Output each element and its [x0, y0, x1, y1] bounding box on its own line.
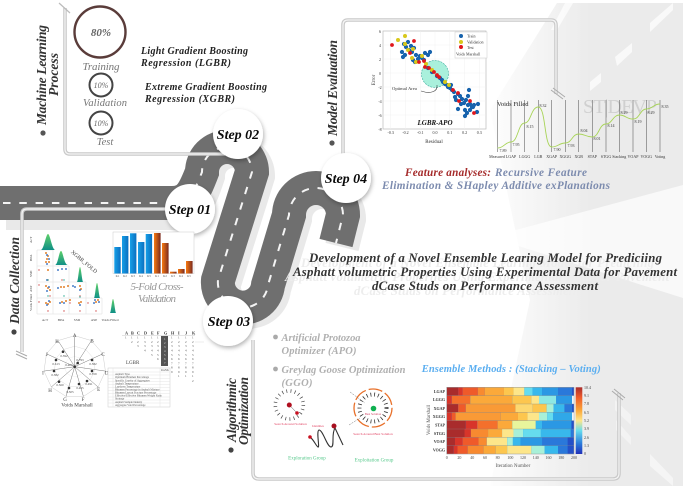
chart: error versus residual scatter plot: -4 [378, 99, 382, 104]
chart: pair plot [29, 234, 119, 322]
step 04 badge [321, 153, 371, 203]
chart: voids filled line chart: LGB [534, 154, 543, 159]
row VOGG [447, 446, 574, 454]
step 03 badge: Step 03 [208, 315, 250, 330]
chart: voids filled line chart: LGGG [519, 154, 530, 159]
chart: ensemble stacked heatmap: 160 [546, 455, 552, 460]
chart: ensemble stacked heatmap: 100 [507, 455, 513, 460]
chart: error versus residual scatter plot: -6 [378, 113, 382, 118]
chart: voids filled line chart: 8.01 [594, 136, 600, 141]
chart: voids filled line chart: XGAP [546, 154, 558, 159]
chart: ensemble stacked heatmap: XGAP [434, 406, 446, 411]
chart: error versus residual scatter plot: LGBR-APO [416, 119, 452, 127]
chart: voids filled line chart: LGAP [506, 154, 517, 159]
chart: ensemble stacked heatmap: 40 [470, 455, 474, 460]
chart: radar feature importance: K [55, 340, 59, 345]
chart: radar feature importance: 0.613 [52, 362, 60, 366]
title: ghost reflection: Development of a Novel Ensemble Learing Model for Prediciing [300, 256, 655, 270]
step 04 badge: Step 04 [325, 172, 367, 187]
table: feature elimination ranks [108, 330, 204, 407]
chart: ensemble stacked heatmap: 5.2 [584, 418, 589, 423]
chart: radar feature importance: H [48, 389, 52, 394]
table: feature elimination ranks: Strategy [115, 398, 125, 401]
diagram: exploitation around best solution: Best Solution [365, 412, 382, 416]
chart: error versus residual scatter plot: 0.3 [477, 130, 482, 135]
chart: voids filled line chart: STAP [588, 154, 598, 159]
chart: radar feature importance: 0.505 [66, 390, 74, 394]
list: greylag goose optimization: (GGO) [282, 378, 312, 389]
chart: voids filled line chart: 8.29 [648, 110, 654, 115]
step 03 badge [203, 296, 253, 346]
table: feature elimination ranks: Aggregate Void Percentage [115, 404, 146, 407]
chart: ensemble stacked heatmap: 1.3 [584, 443, 589, 448]
table: feature elimination ranks: Specific Gravity of Aggregates [115, 379, 150, 382]
text: feature analyses: Recursive Feature [494, 167, 587, 179]
chart: error versus residual scatter plot: Validation [467, 40, 483, 44]
heading: machine learning process: Machine Learning [34, 25, 49, 126]
chart: five fold bar chart [113, 232, 194, 278]
table: feature elimination ranks: ABCDEFGHIJK [125, 330, 196, 336]
chart: pair plot: Voids Filled [29, 294, 33, 311]
chart: ensemble stacked heatmap: VOGG [433, 448, 445, 452]
row STGG [447, 429, 574, 437]
chart: voids filled line chart: 8.32 [540, 103, 546, 108]
chart: pair plot: Voids Filled [102, 318, 119, 322]
chart: error versus residual scatter plot: Optimal Area [392, 86, 417, 91]
diagram: exploitation around best solution: Search Around Best Solution [353, 432, 393, 436]
text: feature analyses: Elimination & SHapley Additive exPlanations [381, 180, 611, 192]
chart: error versus residual scatter plot: 6 [379, 29, 381, 34]
chart: voids filled line chart: ST|DEVP [583, 96, 657, 118]
table: feature elimination ranks: 111 [178, 374, 194, 378]
chart: error versus residual scatter plot: 0.0 [432, 130, 438, 135]
diagram: exploration zigzag: Identities [312, 424, 325, 428]
chart: radar feature importance: 0.582 [89, 362, 97, 366]
chart: pair plot: ASP [29, 286, 33, 292]
chart: voids filled line chart: Voids Filled [497, 101, 529, 108]
title: ghost reflection: Asphatt volumetric Properties Using Experimental Data for Pavement [284, 270, 669, 284]
chart: voids filled line chart: 8.35 [662, 104, 668, 109]
chart: ensemble stacked heatmap: 120 [520, 455, 526, 460]
table: feature elimination ranks: 7777 [171, 362, 194, 366]
table: feature elimination ranks: 33333333 [137, 344, 194, 348]
chart: radar feature importance: 0.392 [60, 354, 68, 358]
table: feature elimination ranks: Effective/Effective Bitumen Weight Ratio [115, 394, 163, 398]
chart: radar feature importance: Voids Marshall [61, 402, 93, 408]
chart: ensemble stacked heatmap: 9.1 [584, 393, 589, 398]
table: feature elimination ranks: 8888 [171, 366, 194, 370]
title: main heading: Development of a Novel Ensemble Learing Model for Prediciing [308, 251, 663, 265]
frame: model evaluation [343, 20, 565, 165]
chart: ensemble stacked heatmap: Voids Marshall [427, 404, 432, 435]
chart: pair plot: BPA [29, 254, 33, 261]
chart: five fold bar chart: K2 [123, 274, 127, 278]
chart: voids filled line chart: Measured [489, 154, 505, 159]
chart: voids filled line chart: Stacking [612, 154, 626, 159]
step 01 badge [165, 184, 215, 234]
chart: voids filled line chart: STGG [601, 154, 611, 159]
row XGAP [447, 404, 574, 412]
text: boosting regression models: Extreme Gradient Boosting [144, 82, 267, 93]
chart: ensemble stacked heatmap: 6.5 [584, 410, 589, 415]
chart: five fold bar chart: K4 [179, 274, 183, 278]
chart: voids filled line chart: 7.89 [500, 148, 506, 153]
chart: radar feature importance: 0.491 [85, 382, 93, 386]
table: feature elimination ranks: Bitumen Layout Fracture Percentage [115, 391, 157, 394]
chart: pair plot: XGBR_FOLD [69, 250, 98, 275]
list: artificial protozoa optimizer [273, 333, 360, 357]
heading: algorithmic optimization [224, 377, 251, 453]
chart: five fold bar chart: K5 [147, 274, 151, 278]
heading: algorithmic optimization: Algorithmic [224, 378, 239, 443]
chart: error versus residual scatter plot: -0.1 [417, 130, 423, 135]
data split: training validation test: Training [82, 61, 120, 73]
step 02 badge [213, 109, 263, 159]
chart: voids filled line chart [489, 96, 668, 159]
chart: voids filled line chart: XGB [574, 154, 583, 159]
chart: error versus residual scatter plot: Residual [425, 140, 443, 145]
diagram: exploration zigzag [288, 424, 343, 462]
chart: error versus residual scatter plot: 0.2 [462, 130, 467, 135]
chart: error versus residual scatter plot: 0 [379, 71, 381, 76]
chart: five fold bar chart: K3 [171, 274, 175, 278]
chart: ensemble stacked heatmap: VOAP [434, 439, 446, 444]
chart: ensemble stacked heatmap: 0 [446, 455, 448, 460]
chart: radar feature importance: 0.793 [76, 358, 84, 362]
diagram: exploration zigzag: Exploration Group [288, 456, 326, 462]
chart: voids filled line chart: 8.15 [526, 124, 534, 129]
list: greylag goose optimization: Greylag Goose Optimization [282, 365, 406, 376]
step 01 badge: Step 01 [169, 203, 211, 218]
frame: data collection [16, 209, 170, 359]
table: feature elimination ranks: 1234567 [164, 337, 166, 365]
heading: ensemble methods: Ensemble Methods : (Stacking – Voting) [421, 364, 601, 375]
title: ghost reflection [284, 256, 669, 298]
chart: ensemble stacked heatmap: Iteration Number [496, 464, 531, 469]
row STAP [447, 421, 574, 429]
table: feature elimination ranks: Laydown Temperature [115, 385, 141, 388]
chart: voids filled line chart: Voting [655, 154, 665, 159]
chart: ensemble stacked heatmap: STGG [434, 431, 445, 436]
chart: ensemble stacked heatmap: LGGG [433, 397, 445, 402]
table: feature elimination ranks: 1111111111 [125, 336, 194, 340]
chart: five fold bar chart: K2 [163, 274, 167, 278]
table: feature elimination ranks: 9999 [171, 370, 194, 374]
heading: machine learning process [34, 25, 61, 136]
chart: error versus residual scatter plot: Test [467, 45, 474, 50]
table: feature elimination ranks: LGBR [126, 361, 140, 366]
frame: algorithmic optimization [253, 340, 625, 479]
data split: training validation test [74, 6, 127, 148]
list: artificial protozoa optimizer: Artificial Protozoa [280, 333, 360, 344]
table: feature elimination ranks: 223222222 [131, 340, 194, 344]
chart: error versus residual scatter plot: Train [467, 34, 476, 38]
table: feature elimination ranks: 2 [192, 379, 194, 383]
chart: radar feature importance: 0.405 [65, 363, 73, 367]
diagram: exploitation around best solution: Exploitation Group [355, 458, 394, 464]
chart: voids filled line chart: XGGG [560, 154, 571, 159]
chart: ensemble stacked heatmap [427, 385, 591, 469]
table: feature elimination ranks: 4444444 [144, 348, 194, 352]
chart: radar feature importance: B [90, 340, 94, 344]
table: feature elimination ranks: Asphalt Type [115, 373, 131, 376]
diagram: search around solution: Search Around Solution [274, 422, 307, 426]
chart: ensemble stacked heatmap: 140 [533, 455, 539, 460]
text: boosting regression models: Regression (XGBR) [144, 94, 235, 105]
list: artificial protozoa optimizer: Optimizer (APO) [282, 346, 356, 357]
table: feature elimination ranks: Bitumen Percentage in Asphalt Mixture [115, 388, 160, 391]
row XGGG [447, 412, 574, 421]
chart: ensemble stacked heatmap: STAP [435, 422, 446, 428]
chart: ensemble stacked heatmap: 2.6 [584, 435, 589, 440]
chart: pair plot: AcT [29, 236, 33, 243]
chart: radar feature importance: 0.382 [51, 373, 59, 377]
chart: five fold bar chart: K3 [131, 274, 135, 278]
chart: ensemble stacked heatmap: XGGG [433, 414, 445, 419]
chart: pair plot: BPA [58, 318, 65, 322]
chart: error versus residual scatter plot [372, 29, 487, 145]
chart: error versus residual scatter plot: Error [372, 74, 377, 85]
text: feature analyses: Feature analyses: [404, 167, 491, 179]
list: greylag goose optimization [273, 365, 406, 389]
label: five fold cross validation [130, 281, 184, 305]
chart: ensemble stacked heatmap: 180 [558, 455, 564, 460]
row LGGG [447, 396, 574, 404]
table: feature elimination ranks: 66666 [157, 357, 194, 361]
chart: pair plot: SSD [29, 270, 33, 277]
text: boosting regression models [140, 46, 267, 105]
chart: voids filled line chart: 7.93 [568, 143, 574, 148]
data split: training validation test: 80% [91, 27, 111, 39]
winding road with steps [0, 147, 349, 312]
data split: training validation test: Test [97, 137, 114, 148]
chart: five fold bar chart: K1 [155, 274, 159, 278]
chart: voids filled line chart: 8.14 [608, 123, 614, 128]
title: main heading: Asphatt volumetric Properties Using Experimental Data for Pavement [292, 265, 677, 279]
chart: error versus residual scatter plot: 4 [379, 43, 381, 48]
chart: error versus residual scatter plot: -2 [378, 85, 382, 90]
table: feature elimination ranks: 555555 [151, 353, 194, 357]
chart: radar feature importance: F [82, 398, 85, 403]
text: feature analyses [381, 167, 611, 192]
chart: pair plot: SSD [74, 318, 81, 322]
chart: error versus residual scatter plot: Voids Marshall [456, 52, 481, 56]
chart: ensemble stacked heatmap: 200 [571, 455, 577, 460]
chart: voids filled line chart: 8.04 [580, 128, 588, 133]
chart: voids filled line chart: 8.29 [620, 110, 628, 115]
heading: model evaluation: Model Evaluation [325, 40, 340, 137]
chart: radar feature importance [42, 334, 109, 408]
data split: training validation test: Validation [83, 98, 127, 109]
chart: radar feature importance: 0.560 [56, 383, 64, 387]
chart: five fold bar chart: K4 [139, 274, 143, 278]
heading: algorithmic optimization: Optimization [236, 377, 251, 445]
chart: radar feature importance: 0.559 [89, 372, 97, 376]
chart: ensemble stacked heatmap: 7.8 [584, 401, 589, 406]
chart: radar feature importance: E [97, 388, 100, 393]
chart: five fold bar chart: K1 [116, 274, 120, 278]
chart: ensemble stacked heatmap: 60 [483, 455, 487, 460]
table: feature elimination ranks: RANK [161, 369, 169, 372]
chart: voids filled line chart: VOGG [641, 154, 652, 159]
chart: voids filled line chart: VOAP [628, 154, 639, 159]
chart: radar feature importance: 0.495 [76, 386, 84, 390]
chart: ensemble stacked heatmap: 0 [584, 451, 586, 456]
table: feature elimination ranks: Optimum Bitumen Percentage [115, 376, 150, 379]
chart: ensemble stacked heatmap: 80 [496, 455, 500, 460]
data split: training validation test: 10% [94, 119, 109, 128]
frame: machine learning process [59, 3, 225, 154]
label: five fold cross validation: Validation [138, 293, 176, 305]
chart: voids filled line chart: 7.95 [512, 142, 520, 147]
background: grey diagonal light shapes [490, 3, 683, 486]
chart: voids filled line chart: 7.90 [554, 147, 560, 152]
chart: radar feature importance: A [73, 334, 77, 339]
row VOAP [447, 437, 574, 446]
chart: error versus residual scatter plot: -8 [378, 127, 382, 132]
step 02 badge: Step 02 [217, 128, 259, 143]
text: boosting regression models: Light Gradient Boosting [140, 46, 248, 57]
chart: pair plot: AcT [42, 318, 49, 322]
chart: five fold bar chart: K5 [187, 274, 191, 278]
chart: error versus residual scatter plot: 0.1 [447, 130, 452, 135]
diagram: exploitation around best solution [349, 389, 394, 464]
chart: ensemble stacked heatmap: 20 [457, 455, 461, 460]
chart: radar feature importance: C [101, 353, 105, 358]
title: ghost reflection: dCase Studs on Performance Assessment [354, 284, 580, 298]
text: boosting regression models: Regression (LGBR) [140, 58, 231, 69]
row LGAP [447, 387, 574, 396]
chart: radar feature importance: I [42, 372, 44, 376]
heading: machine learning process: Process [46, 53, 61, 96]
chart: radar feature importance: G [63, 398, 67, 403]
heading: data collection: Data Collection [7, 237, 22, 325]
chart: radar feature importance: D [105, 372, 109, 376]
diagram: search around solution [274, 391, 307, 426]
chart: error versus residual scatter plot: -0.3 [388, 130, 394, 135]
chart: radar feature importance: J [46, 353, 48, 358]
chart: error versus residual scatter plot: 2 [379, 57, 381, 62]
chart: voids filled line chart: 8.19 [634, 119, 642, 124]
chart: ensemble stacked heatmap: LGAP [434, 389, 446, 394]
label: five fold cross validation: 5-Fold Cross- [130, 281, 184, 293]
chart: ensemble stacked heatmap: 10.4 [584, 385, 591, 390]
chart: error versus residual scatter plot: -0.2 [402, 130, 409, 135]
title: main heading: dCase Studs on Performance Assessment [372, 279, 598, 293]
chart: pair plot: ASP [91, 318, 97, 322]
table: feature elimination ranks: Asphalt Sample Density [115, 401, 143, 404]
data split: training validation test: 10% [94, 81, 109, 90]
table: feature elimination ranks: Asphalt Temperature [115, 382, 139, 385]
chart: ensemble stacked heatmap: 3.9 [584, 426, 589, 431]
title: main heading [292, 251, 677, 293]
